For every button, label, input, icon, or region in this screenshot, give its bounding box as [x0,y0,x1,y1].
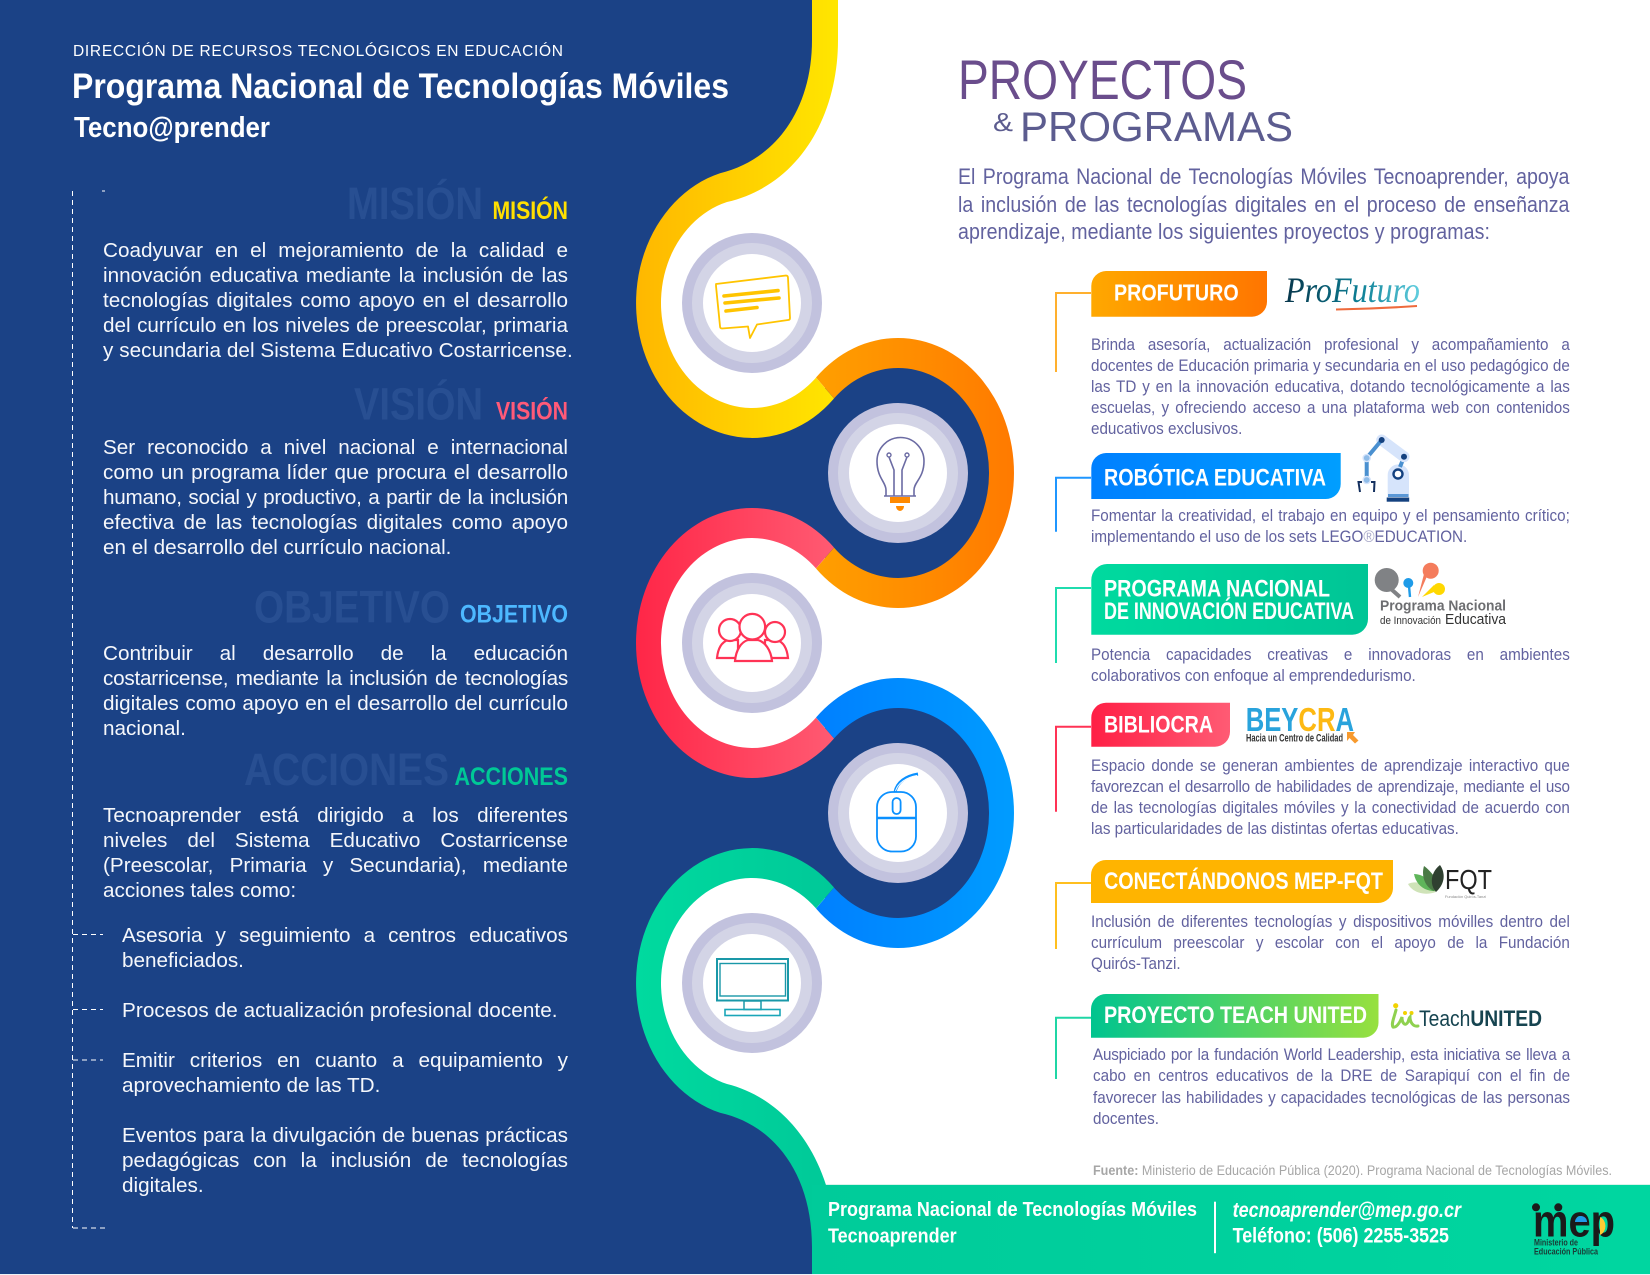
text block: visión: Ser reconocido a nivel nacional e internacional [103,436,568,459]
heading: Misión: MISIÓN [492,195,568,225]
footer program name [828,1199,1197,1248]
logo: FQT: Fundación Quirós-Tanzi [1445,894,1486,899]
logo: BEYCRA: BEYCRA [1246,701,1354,738]
icon: monitor in rings [682,913,822,1053]
logo: BEYCRA: Hacia un Centro de Calidad [1246,732,1343,744]
list item: eventos: pedagógicas con la inclusión de tecnologías [122,1149,568,1172]
text: Bibliocra description: de las tecnologías digitales móviles y la conectividad de acuerdo con [1091,798,1570,817]
text block: objetivo: nacional. [103,717,186,740]
text: Conectándonos description [1091,912,1570,973]
text: Bibliocra description: favorezcan el desarrollo de habilidades de aprendizaje, mediante el uso [1091,777,1570,796]
text: Robótica description: implementando el uso de los sets LEGO®EDUCATION. [1091,527,1467,546]
text: Innovación description: colaborativos con enfoque al emprendedurismo. [1091,666,1416,685]
text: Profuturo description [1091,334,1570,438]
heading: Proyectos & Programas: PROYECTOS [958,48,1247,111]
footer band [812,1184,1650,1274]
card: Innovación tag: PROGRAMA NACIONAL [1104,576,1330,603]
logo: TeachUNITED [1392,1003,1542,1031]
text: Conectándonos description: Inclusión de diferentes tecnologías y dispositivos móvilles dentro del [1091,912,1570,930]
logo: TeachUNITED: TeachUNITED [1419,1006,1542,1031]
logo: Programa Nacional de Innovación Educativa [1375,563,1507,628]
list item: emitir [122,1049,568,1097]
card: Conectándonos tag: CONECTÁNDONOS MEP-FQT [1104,867,1383,895]
logo: FQT: FQT [1445,864,1492,895]
heading: Acciones: ACCIONES [454,763,568,791]
ribbon segment: orange [816,338,1014,608]
heading: Acciones: ACCIONES [244,744,449,795]
text: Robótica description: Fomentar la creatividad, el trabajo en equipo y el pensamiento crítico; [1091,506,1570,525]
list item: eventos [122,1124,568,1197]
text: Teach United description [1093,1045,1570,1128]
text block: misión [103,239,573,362]
footer contact [1233,1199,1463,1248]
intro paragraph: aprendizaje, mediante los siguientes proyectos y programas: [958,219,1490,244]
text: Profuturo description: Brinda asesoría, actualización profesional y acompañamiento a [1091,334,1570,354]
text: Innovación description [1091,644,1570,685]
ribbon segment: green [636,848,840,1273]
text block: misión: del currículo en los niveles de preescolar, primaria [103,314,568,337]
icon: light bulb in rings [828,403,968,543]
footer contact: Teléfono: (506) 2255-3525 [1233,1225,1449,1248]
panel: navy left background with winding edge [0,0,1002,1275]
logo: MEP: mep [1533,1196,1615,1247]
logo: Programa Nacional de Innovación Educativa: de Innovación [1380,615,1441,627]
card: Innovación tag [1056,564,1368,663]
text block: visión: efectiva de las tecnologías digitales como apoyo [103,511,568,534]
text: Teach United description: favorecer las habilidades y capacidades tecnológicas de las personas [1093,1088,1570,1107]
dashed timeline [72,191,109,1228]
heading: Objetivo: OBJETIVO [460,600,568,628]
intro paragraph [958,164,1570,244]
text block: acciones: Tecnoaprender está dirigido a los diferentes [103,804,568,827]
logo: MEP: Educación Pública [1534,1246,1599,1257]
text: Conectándonos description: Quirós-Tanzi. [1091,954,1181,973]
heading: Misión: MISIÓN [347,178,483,229]
subtitle: Tecno@prender [74,112,270,144]
footer program name: Programa Nacional de Tecnologías Móviles [828,1199,1197,1221]
text: Profuturo description: escuelas, y ofreciendo acceso a una plataforma web con contenidos [1091,398,1570,417]
logo: Programa Nacional de Innovación Educativa: Programa Nacional [1380,598,1506,615]
text: Profuturo description: educativos exclusivos. [1091,419,1242,438]
main title: Programa Nacional de Tecnologías Móviles [72,67,729,106]
text: Profuturo description: docentes de Educación primaria y secundaria en el uso pedagógico de [1091,356,1570,375]
text: Teach United description: cabo en centros educativos de la DRE de Sarapiquí con el fin de [1093,1066,1570,1085]
text block: acciones [103,804,568,902]
footer program name: Tecnoaprender [828,1226,957,1248]
list item: eventos: Eventos para la divulgación de buenas prácticas [122,1124,568,1147]
text: Bibliocra description: Espacio donde se generan ambientes de aprendizaje interactivo que [1091,756,1570,774]
logo: ProFuturo: ProFuturo [1284,270,1420,310]
text block: visión: como un programa líder que procura el desarrollo [103,461,568,484]
text block: acciones: (Preescolar, Primaria y Secundaria), mediante [103,854,568,877]
text block: objetivo: digitales como apoyo en el desarrollo del currículo [103,692,568,715]
card: Teach United tag [1056,994,1378,1079]
ribbon segment: blue [816,678,1014,948]
text block: objetivo [103,642,568,740]
text block: visión: humano, social y productivo, a partir de la inclusión [103,486,568,509]
card: Robótica tag [1056,453,1341,532]
heading: Visión: VISIÓN [354,378,483,430]
text block: objetivo: costarricense, mediante la inclusión de tecnologías [103,667,568,690]
heading: Objetivo: OBJETIVO [254,581,450,632]
text: Teach United description: docentes. [1093,1109,1159,1128]
department line: DIRECCIÓN DE RECURSOS TECNOLÓGICOS EN EDUCACIÓN [73,43,563,60]
text block: acciones: acciones tales como: [103,879,296,902]
source note: Fuente: Ministerio de Educación Pública (2020). Programa Nacional de Tecnologías Móviles. [1093,1163,1612,1178]
intro paragraph: El Programa Nacional de Tecnologías Móviles Tecnoaprender, apoya [958,164,1569,189]
list item: emitir: Emitir criterios en cuanto a equipamiento y [122,1049,568,1072]
text: Profuturo description: las TD y en la innovación educativa, dotando tecnológicamente a las [1091,377,1570,396]
intro paragraph: la inclusión de las tecnologías digitales en el proceso de enseñanza [958,192,1569,217]
text: Bibliocra description: las particularidades de las distintas ofertas educativas. [1091,819,1459,838]
text: Innovación description: Potencia capacidades creativas e innovadoras en ambientes [1091,644,1570,664]
heading: Proyectos & Programas: & [993,107,1013,137]
list item: asesoría: Asesoria y seguimiento a centros educativos [122,924,568,947]
text block: visión [103,436,568,559]
heading: Visión: VISIÓN [496,396,568,426]
heading: Proyectos & Programas: PROGRAMAS [1020,103,1293,150]
text: Conectándonos description: currículum preescolar y escolar con el apoyo de la Fundación [1091,933,1570,952]
text block: objetivo: Contribuir al desarrollo de la educación [103,642,568,665]
text: Robótica description [1091,506,1570,546]
text block: misión: y secundaria del Sistema Educativo Costarricense. [103,339,573,362]
icon: robot arm [1358,437,1409,502]
header: left titles [72,43,729,144]
list item: asesoría [122,924,568,972]
text block: misión: innovación educativa mediante la inclusión de las [103,264,568,287]
text block: visión: en el desarrollo del currículo nacional. [103,536,451,559]
text: Bibliocra description [1091,756,1570,838]
list item: emitir: aprovechamiento de las TD. [122,1074,380,1097]
ribbon segment: yellow [636,0,838,438]
logo: MEP: Ministerio de [1534,1238,1578,1249]
logo: Programa Nacional de Innovación Educativa: Educativa [1445,611,1507,628]
list item: eventos: digitales. [122,1174,204,1197]
logo: FQT [1408,864,1492,899]
card: Innovación tag: DE INNOVACIÓN EDUCATIVA [1104,597,1354,625]
list item: procesos: Procesos de actualización profesional docente. [122,999,558,1022]
ribbon segment: red [636,508,834,778]
icon: computer mouse in rings [828,743,968,883]
text block: misión: tecnologías digitales como apoyo en el desarrollo [103,289,568,312]
card: Robótica tag: ROBÓTICA EDUCATIVA [1104,464,1326,492]
card: Bibliocra tag [1056,703,1230,812]
heading: Proyectos & Programas [958,48,1293,150]
card: Teach United tag: PROYECTO TEACH UNITED [1104,1002,1367,1029]
text block: acciones: niveles del Sistema Educativo Costarricense [103,829,568,852]
footer contact: tecnoaprender@mep.go.cr [1233,1199,1463,1222]
card: Bibliocra tag: BIBLIOCRA [1104,712,1213,739]
card: Profuturo tag: PROFUTURO [1114,280,1239,306]
list item: asesoría: beneficiados. [122,949,244,972]
card: Conectándonos tag [1056,860,1393,949]
icon: speech bubble in rings [682,233,822,373]
winding ribbon [636,0,1014,1273]
text block: misión: Coadyuvar en el mejoramiento de la calidad e [103,239,568,262]
icon: group of people in rings [682,573,822,713]
card: Profuturo tag [1056,271,1267,372]
text: Teach United description: Auspiciado por la fundación World Leadership, esta iniciativa se lleva a [1093,1045,1570,1064]
